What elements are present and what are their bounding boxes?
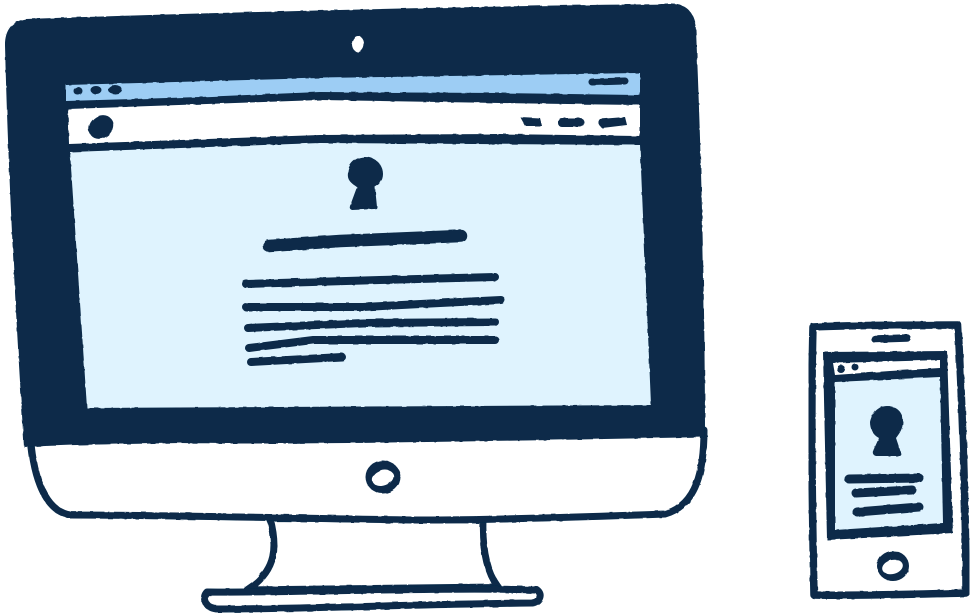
monitor stand xyxy=(247,518,498,590)
phone browser bar xyxy=(833,360,940,375)
screen xyxy=(70,143,651,408)
desktop computer xyxy=(5,4,705,609)
phone keyhole xyxy=(870,406,903,456)
smartphone xyxy=(812,325,966,595)
nav items xyxy=(520,117,627,128)
phone body xyxy=(812,325,966,595)
window dots xyxy=(74,85,122,95)
heading bar xyxy=(269,236,461,246)
monitor chin xyxy=(30,430,704,520)
phone dots xyxy=(837,365,845,373)
phone text lines xyxy=(849,478,919,512)
logo dot xyxy=(84,110,118,144)
phone screen xyxy=(835,377,943,530)
phone home button xyxy=(877,551,909,581)
browser title bar xyxy=(66,73,640,101)
camera xyxy=(352,36,364,52)
monitor base xyxy=(204,589,540,609)
title bar control xyxy=(592,81,625,82)
browser toolbar xyxy=(68,100,640,144)
monitor bezel xyxy=(5,4,705,447)
phone screen frame xyxy=(823,351,953,540)
keyhole icon xyxy=(348,157,383,210)
text lines xyxy=(246,277,501,362)
speaker xyxy=(875,338,907,339)
home button xyxy=(366,460,400,494)
